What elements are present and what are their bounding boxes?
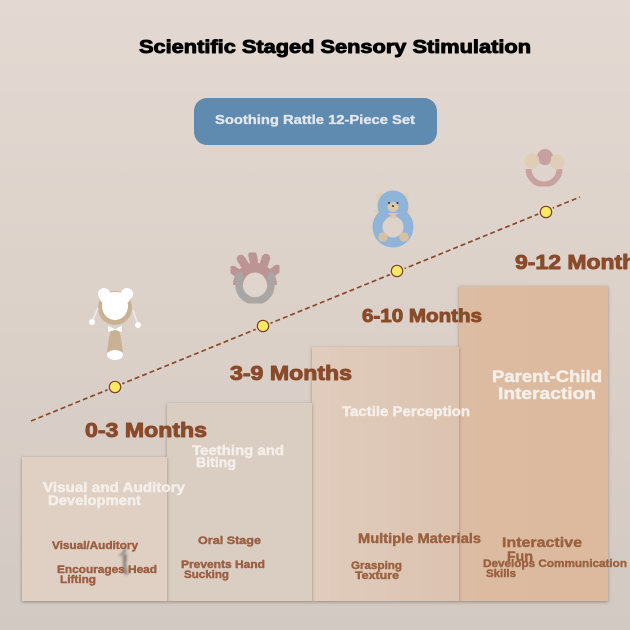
detail: develops communication skills: Develops Communication xyxy=(483,558,627,570)
icon: crown teether ring xyxy=(233,255,277,301)
panel heading: teething and biting: Teething and xyxy=(192,443,284,458)
age label 6-10 months: 6-10 Months xyxy=(362,305,482,326)
panel: 3-9 months xyxy=(167,403,312,601)
detail: encourages head lifting xyxy=(57,564,157,586)
detail: grasping texture xyxy=(351,560,402,582)
panel heading: parent-child interaction xyxy=(492,368,602,403)
panel heading: visual and auditory development: Visual and Auditory xyxy=(43,480,186,495)
detail: oral stage: Oral Stage xyxy=(198,535,261,547)
detail: interactive fun: Interactive xyxy=(502,534,582,550)
panel heading: visual and auditory development: Development xyxy=(48,493,142,508)
subtitle pill: Soothing Rattle 12-Piece Set xyxy=(215,112,416,127)
panel heading: parent-child interaction: Parent-Child xyxy=(492,368,602,386)
detail: grasping texture: Grasping xyxy=(351,560,402,572)
panel heading: visual and auditory development xyxy=(43,480,186,508)
detail: interactive fun: Fun xyxy=(507,548,533,564)
detail: encourages head lifting: Encourages Head xyxy=(57,564,157,576)
subtitle pill xyxy=(194,98,437,145)
detail: prevents hand sucking: Prevents Hand xyxy=(181,559,265,571)
panel heading: tactile perception: Tactile Perception xyxy=(342,404,470,419)
title: Scientific Staged Sensory Stimulation xyxy=(139,36,531,57)
timeline marker 3-9 months xyxy=(255,318,271,334)
detail: develops communication skills: Skills xyxy=(486,568,516,580)
icon: gray smudge figure xyxy=(118,540,128,575)
panel: 9-12 months xyxy=(459,286,608,601)
detail: interactive fun xyxy=(502,534,582,564)
panel heading: parent-child interaction: Interaction xyxy=(498,385,596,403)
icon: blue bear teether xyxy=(372,190,414,248)
detail: multiple materials: Multiple Materials xyxy=(358,531,481,546)
timeline marker 6-10 months xyxy=(389,263,405,279)
detail: prevents hand sucking: Sucking xyxy=(184,569,229,581)
timeline marker 0-3 months xyxy=(107,379,123,395)
detail: grasping texture: Texture xyxy=(355,570,399,582)
detail: encourages head lifting: Lifting xyxy=(60,574,96,586)
panel: 0-3 months xyxy=(22,457,167,601)
icon: white bear rattle xyxy=(89,288,141,360)
age label 3-9 months: 3-9 Months xyxy=(230,362,352,385)
detail: develops communication skills xyxy=(483,558,627,580)
panel heading: teething and biting xyxy=(192,443,284,470)
panel heading: teething and biting: Biting xyxy=(196,455,236,470)
timeline marker 9-12 months xyxy=(538,204,554,220)
timeline: dashed growth line xyxy=(31,197,580,421)
age label 0-3 months: 0-3 Months xyxy=(85,419,207,442)
icon: flower teether ring xyxy=(524,149,564,184)
detail: visual/auditory: Visual/Auditory xyxy=(52,540,139,552)
panel: 6-10 months xyxy=(312,347,459,601)
detail: prevents hand sucking xyxy=(181,559,265,581)
